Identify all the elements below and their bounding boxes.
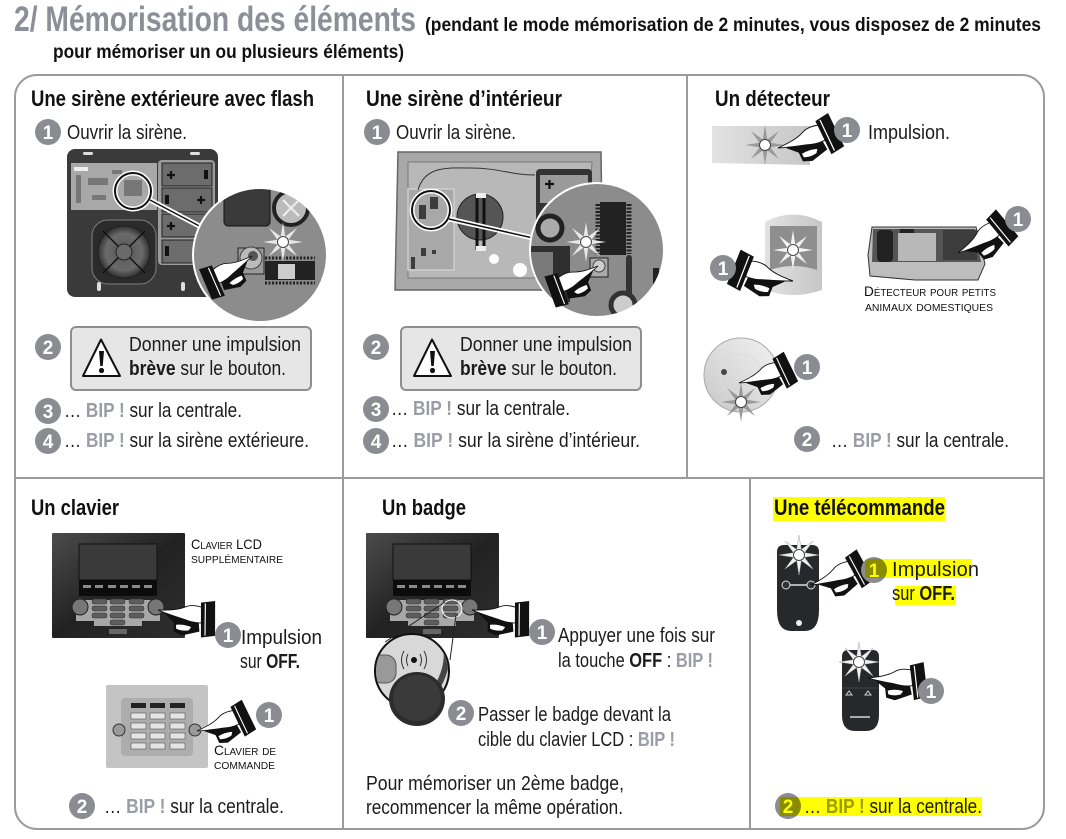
caption: pet detector: animaux domestiques (865, 298, 993, 314)
step 2 (794, 426, 1009, 452)
illustration: indoor siren open (395, 152, 603, 290)
step 4: … BIP ! sur la sirène d’intérieur. (391, 430, 640, 452)
magnifier: button close-up (528, 182, 665, 318)
magnifier: button close-up (192, 185, 328, 323)
step 2: 2 (802, 430, 812, 451)
subtitle: pour mémoriser un ou plusieurs éléments) (53, 42, 404, 63)
caption: control keypad: Clavier de (214, 742, 276, 758)
heading: badge: Un badge (382, 495, 466, 520)
heading: detector: Un détecteur (715, 86, 830, 111)
panel: detector (704, 86, 1031, 452)
heading: outdoor siren: Une sirène extérieure avec flash (31, 86, 314, 111)
illustration: badge close-up (372, 602, 456, 726)
illustration: pet detector (868, 206, 1031, 280)
step 1 badge (861, 557, 887, 583)
illustration: outdoor siren open (67, 149, 218, 297)
illustration: LCD keypad with hand (366, 533, 555, 645)
second badge note (366, 773, 624, 819)
keypad instruction (240, 627, 322, 673)
sensor instruction: Impulsion. (868, 122, 950, 144)
step 2 badge (448, 700, 474, 726)
step 2: … BIP ! sur la centrale. (831, 430, 1009, 452)
step 2 badge: 2 (371, 338, 381, 359)
panel: outdoor siren (31, 86, 328, 454)
step 2 badge (363, 334, 389, 360)
illustration: two-button remote (777, 535, 875, 631)
caption: LCD keypad (191, 536, 283, 566)
warning callout: brève sur le bouton. (460, 358, 617, 380)
caption: pet detector: Détecteur pour petits (864, 283, 996, 299)
panel: keypad (31, 495, 322, 819)
caption: pet detector (864, 283, 996, 314)
step 2 text: Passer le badge devant la (478, 704, 672, 726)
step 3: … BIP ! sur la centrale. (391, 398, 570, 420)
illustration: smoke detector (704, 338, 820, 422)
illustration: LCD keypad (52, 533, 241, 648)
step 1 badge (364, 119, 390, 145)
step 1 badge: 1 (43, 123, 54, 144)
keypad instruction: Impulsion (241, 627, 322, 649)
illustration: control keypad: 1 (264, 706, 275, 727)
caption: control keypad (214, 742, 276, 772)
illustration: door sensor: 1 (842, 121, 853, 142)
warning callout (71, 327, 311, 390)
illustration: pet detector: 1 (1013, 210, 1024, 231)
caption: LCD keypad: Clavier LCD (191, 536, 262, 552)
step 1 text (558, 625, 715, 672)
heading: keypad: Un clavier (31, 495, 119, 520)
illustration: smoke detector: 1 (802, 358, 813, 379)
step 4 (35, 428, 309, 454)
icon: warning triangle (83, 340, 120, 376)
step 1 badge (35, 119, 61, 145)
illustration: LCD keypad: 1 (223, 626, 234, 647)
step 2: 2 (783, 797, 793, 818)
step 2 text: cible du clavier LCD : BIP ! (478, 729, 675, 751)
heading: indoor siren: Une sirène d’intérieur (366, 86, 562, 111)
caption: LCD keypad: supplémentaire (191, 550, 283, 566)
title: 2/ Mémorisation des éléments (14, 0, 416, 39)
step 4: 4 (371, 432, 382, 453)
illustration: four-button remote (839, 642, 944, 731)
step 1 text: sur OFF. (892, 583, 955, 605)
warning callout (401, 327, 641, 390)
illustration: door sensor (712, 111, 860, 168)
subtitle (53, 15, 1041, 63)
illustration: LCD keypad with hand: 1 (537, 623, 548, 644)
caption: control keypad: commande (214, 756, 275, 772)
icon: warning triangle (414, 340, 451, 376)
step 3: 3 (43, 402, 53, 423)
step 3: … BIP ! sur la centrale. (64, 400, 242, 422)
illustration: control keypad (106, 685, 282, 768)
step 1 text: Ouvrir la sirène. (396, 122, 516, 144)
illustration: motion detector (710, 214, 822, 302)
heading: remote control: Une télécommande (774, 495, 945, 520)
step 2: … BIP ! sur la centrale. (804, 796, 982, 818)
step 2 text (478, 704, 675, 751)
step 1 badge: 1 (372, 123, 383, 144)
keypad instruction: sur OFF. (240, 651, 300, 673)
step 1 text (892, 559, 979, 605)
step 3 (363, 396, 570, 422)
step 2: 2 (77, 797, 87, 818)
step 4: 4 (43, 432, 54, 453)
step 2 badge: 2 (456, 704, 466, 725)
panel: remote control (773, 495, 982, 819)
step 2 (775, 793, 982, 819)
highlight: step 1 (865, 559, 972, 605)
illustration: motion detector: 1 (718, 259, 729, 280)
second badge note: Pour mémoriser un 2ème badge, (366, 773, 624, 795)
illustration: four-button remote: 1 (926, 682, 937, 703)
step 1 badge: 1 (869, 561, 880, 582)
second badge note: recommencer la même opération. (366, 797, 623, 819)
step 2: … BIP ! sur la centrale. (104, 796, 284, 818)
warning callout: Donner une impulsion (129, 334, 301, 356)
warning callout: Donner une impulsion (460, 334, 632, 356)
step 2 badge (35, 334, 61, 360)
step 2 (69, 793, 284, 819)
step 3: 3 (371, 400, 381, 421)
step 2 badge: 2 (43, 338, 53, 359)
step 1 text: Impulsion (892, 559, 979, 581)
step 3 (35, 398, 242, 424)
warning callout: brève sur le bouton. (129, 358, 286, 380)
step 4: … BIP ! sur la sirène extérieure. (64, 430, 309, 452)
step 1 text: Appuyer une fois sur (558, 625, 715, 647)
step 1 text: Ouvrir la sirène. (67, 122, 187, 144)
step 1 text: la touche OFF : BIP ! (558, 650, 713, 672)
panel: indoor siren (363, 86, 665, 454)
panel: badge (366, 495, 715, 819)
